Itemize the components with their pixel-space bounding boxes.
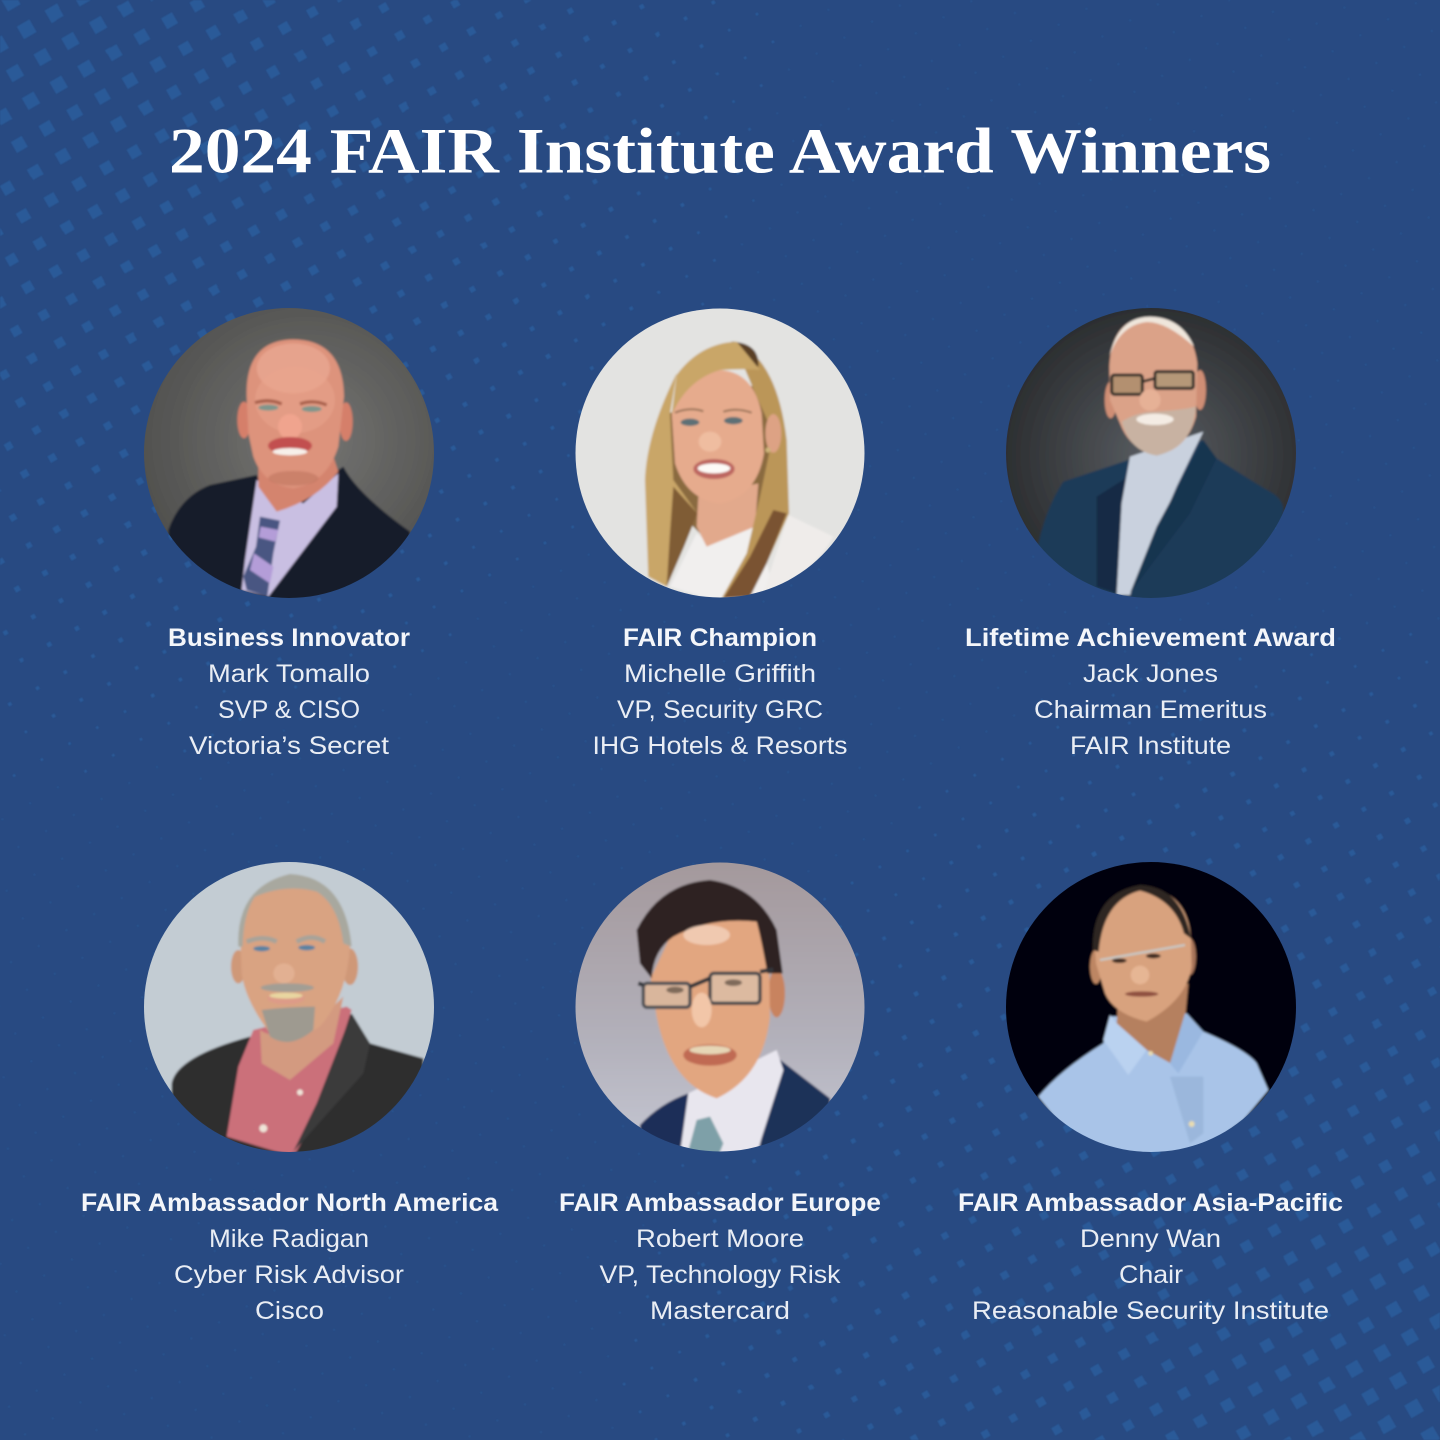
award details: FAIR Champion: FAIR Champion bbox=[623, 624, 817, 652]
portrait: Mike Radigan bbox=[144, 862, 434, 1152]
award details: FAIR Champion bbox=[592, 624, 848, 760]
portrait: Michelle Griffith bbox=[576, 308, 864, 598]
award details: Lifetime Achievement Award: Chairman Emeritus bbox=[1034, 696, 1267, 724]
award details: Business Innovator bbox=[168, 624, 410, 760]
award details: FAIR Ambassador Europe bbox=[559, 1189, 881, 1325]
award details: FAIR Ambassador Asia-Pacific: Denny Wan bbox=[1080, 1225, 1221, 1253]
award details: FAIR Ambassador Europe: Mastercard bbox=[650, 1297, 790, 1325]
portrait: Mark Tomallo bbox=[144, 308, 434, 598]
award details: FAIR Ambassador Europe: VP, Technology Risk bbox=[600, 1261, 841, 1289]
award details: FAIR Ambassador Europe: Robert Moore bbox=[636, 1225, 804, 1253]
award details: FAIR Ambassador Europe: FAIR Ambassador Europe bbox=[559, 1189, 881, 1217]
award details: Lifetime Achievement Award: FAIR Institute bbox=[1070, 732, 1231, 760]
award details: Business Innovator: Business Innovator bbox=[168, 624, 410, 652]
award details: Business Innovator: Victoria’s Secret bbox=[189, 732, 389, 760]
portrait: Denny Wan bbox=[1006, 862, 1296, 1152]
award details: FAIR Champion: Michelle Griffith bbox=[624, 660, 816, 688]
award details: FAIR Ambassador Asia-Pacific: Chair bbox=[1119, 1261, 1183, 1289]
award details: FAIR Champion: VP, Security GRC bbox=[617, 696, 823, 724]
award details: FAIR Ambassador North America: FAIR Ambassador North America bbox=[81, 1189, 499, 1217]
panel: FAIR Ambassador Asia-Pacific bbox=[958, 850, 1343, 1325]
award details: FAIR Ambassador Asia-Pacific bbox=[958, 1189, 1343, 1325]
title: 2024 FAIR Institute Award Winners bbox=[169, 116, 1271, 188]
award details: FAIR Ambassador Asia-Pacific: FAIR Ambassador Asia-Pacific bbox=[958, 1189, 1343, 1217]
panel: Lifetime Achievement Award bbox=[965, 300, 1336, 760]
portrait: Jack Jones bbox=[1006, 308, 1296, 598]
award details: FAIR Ambassador North America bbox=[81, 1189, 499, 1325]
panel: FAIR Ambassador Europe bbox=[559, 850, 881, 1325]
award details: FAIR Ambassador North America: Mike Radigan bbox=[209, 1225, 369, 1253]
panel: Business Innovator bbox=[144, 308, 434, 754]
award details: FAIR Ambassador Asia-Pacific: Reasonable Security Institute bbox=[972, 1297, 1329, 1325]
award details: Lifetime Achievement Award: Lifetime Achievement Award bbox=[965, 624, 1336, 652]
award details: Business Innovator: SVP & CISO bbox=[218, 696, 360, 724]
award details: FAIR Ambassador North America: Cyber Risk Advisor bbox=[174, 1261, 404, 1289]
award details: Lifetime Achievement Award: Jack Jones bbox=[1083, 660, 1218, 688]
panel: FAIR Champion bbox=[576, 308, 864, 754]
award details: FAIR Ambassador North America: Cisco bbox=[255, 1297, 324, 1325]
portrait: Robert Moore bbox=[576, 862, 864, 1152]
award details: FAIR Champion: IHG Hotels & Resorts bbox=[592, 732, 848, 760]
award details: Lifetime Achievement Award bbox=[965, 624, 1336, 760]
panel: FAIR Ambassador North America bbox=[81, 850, 499, 1325]
award details: Business Innovator: Mark Tomallo bbox=[208, 660, 370, 688]
